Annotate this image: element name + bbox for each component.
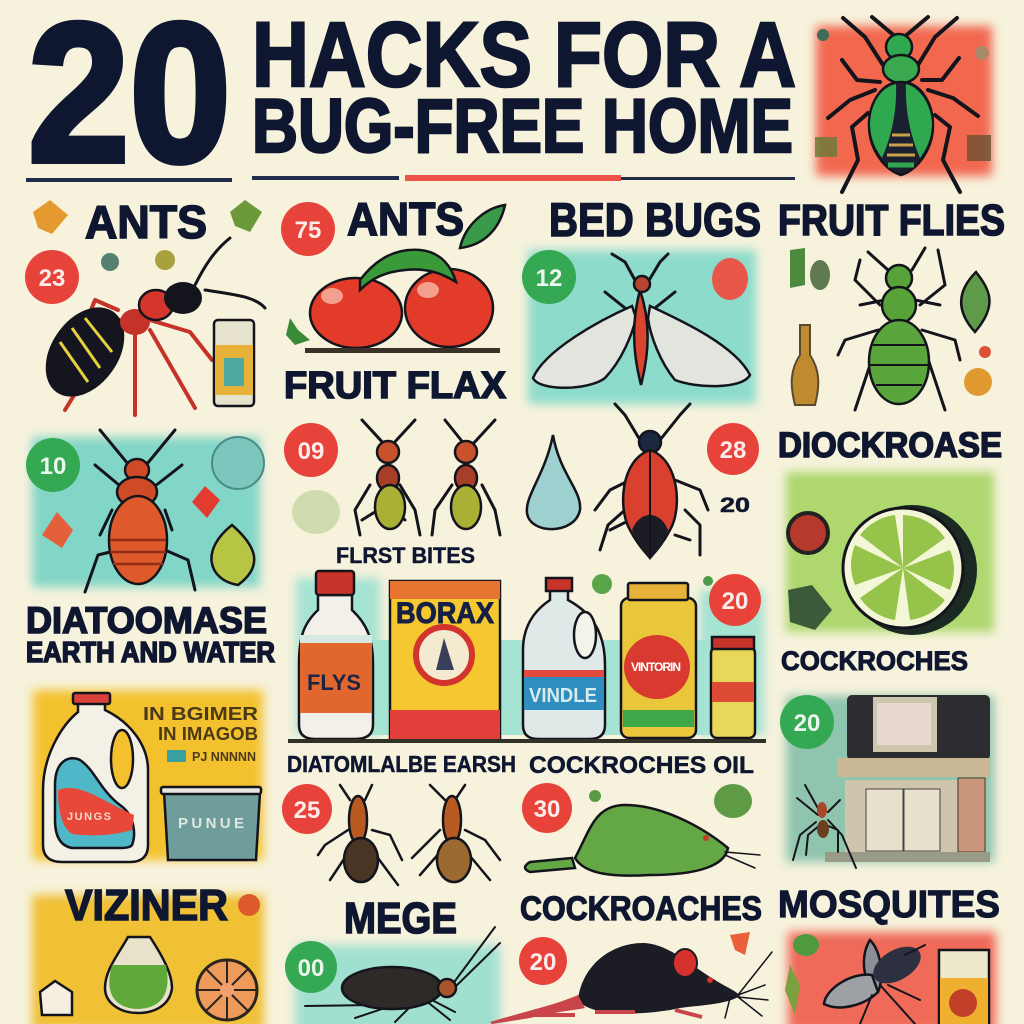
- box: borax: BORAX: [396, 597, 494, 630]
- icon: small basket: [815, 137, 837, 157]
- box: borax: [390, 581, 500, 740]
- icon: bucket: PUNUE: [178, 815, 244, 832]
- panel: top right green bug: [815, 17, 992, 192]
- icon: long leaf: [785, 965, 800, 1015]
- badge: 00: [285, 941, 337, 993]
- badge: 10: 10: [40, 453, 66, 480]
- badge: 75: [281, 202, 335, 256]
- label: first bites: FLRST BITES: [336, 543, 475, 568]
- badge: 30: 30: [534, 796, 560, 823]
- label: beginner text: IN BGIMER: [143, 704, 258, 724]
- badge: 09: [284, 423, 338, 477]
- label: cockroaches: COCKROCHES: [781, 646, 968, 676]
- icon: product jar: [214, 320, 254, 406]
- jar: yellow: [621, 583, 696, 738]
- badge: 23: [25, 250, 79, 304]
- panel: lime: [778, 426, 1002, 635]
- heading: ants: ANTS: [85, 196, 207, 248]
- heading: ants: ANTS: [347, 193, 464, 245]
- icon: leaf right: [230, 200, 262, 232]
- badge: 25: 25: [294, 797, 320, 824]
- icon: winged fly: [533, 254, 750, 388]
- badge: 20: 20: [794, 710, 820, 737]
- badge: 20: [709, 574, 761, 626]
- icon: red splat: [192, 486, 220, 518]
- icon: leaves: [211, 525, 254, 585]
- icon: oil bottle: [792, 325, 818, 405]
- panel: ants 1: [25, 196, 265, 415]
- icon: ant: [31, 238, 265, 415]
- panel: two ants: [284, 420, 500, 568]
- icon: orange leaf: [238, 894, 260, 916]
- panel: black rat: [490, 890, 772, 1024]
- swatch text: PJ NNNNN: [192, 749, 256, 764]
- badge: 20: 20: [722, 588, 748, 615]
- icon: dark bug: [305, 927, 500, 1022]
- panel: drop and ladybug: [527, 404, 759, 558]
- badge: 12: [522, 250, 576, 304]
- badge: 23: 23: [39, 265, 65, 292]
- icon: two tomatoes: [305, 250, 500, 353]
- label: fruit flax: FRUIT FLAX: [284, 365, 507, 407]
- icon: roach: [85, 430, 195, 592]
- panel: green rat: [522, 783, 760, 876]
- badge: 20: [519, 937, 567, 985]
- badge: 09: 09: [298, 438, 324, 465]
- title underline: [26, 175, 795, 182]
- bottle: flys: FLYS: [307, 670, 361, 695]
- label: diatomaceous earth: [26, 600, 275, 669]
- icon: dark leaves: [788, 585, 832, 630]
- icon: small globe: [817, 29, 829, 41]
- icon: leaf: [793, 934, 819, 956]
- icon: jug: JUNGS: [67, 811, 111, 823]
- icon: leaf left: [33, 200, 68, 234]
- icon: red flower: [788, 513, 828, 553]
- icon: black rat: [490, 943, 772, 1024]
- heading: vizner: VIZINER: [65, 881, 228, 930]
- badge: 20: 20: [530, 949, 556, 976]
- icon: computer cabinet: [825, 695, 990, 862]
- swatch text: [167, 749, 256, 764]
- badge: 28: [707, 423, 759, 475]
- panel: bed bugs: [522, 193, 761, 404]
- heading: cockroaches: COCKROACHES: [520, 890, 762, 928]
- icon: glass: [939, 950, 989, 1024]
- icon: small stack: [967, 135, 991, 161]
- panel: computer desk: [780, 695, 994, 868]
- bottle: flys: [299, 571, 373, 739]
- panel: vizner: [32, 881, 264, 1024]
- icon: lime: [843, 505, 977, 635]
- label: diatomaceous earth: DIATOOMASE: [26, 600, 267, 641]
- teal panel: [528, 250, 756, 404]
- leaf left: [286, 318, 310, 345]
- panel: yellow jug: [33, 690, 263, 862]
- panel: mosquitoes: [778, 884, 1000, 1024]
- icon: fruit: [712, 258, 748, 300]
- icon: leaf cluster: [292, 490, 340, 534]
- panel: two bugs: [282, 784, 500, 885]
- badge: 25: [282, 784, 332, 834]
- label: diatomaceous earth: DIATOMLALBE EARSH: [287, 751, 516, 777]
- bottle: vinegar: [523, 578, 605, 739]
- label: 20: 20: [720, 494, 750, 517]
- icon: bucket: [161, 787, 261, 860]
- icon: leaf: [460, 205, 505, 248]
- icon: house: [40, 981, 72, 1015]
- badge: 12: 12: [536, 265, 562, 292]
- icon: water drop: [527, 435, 580, 529]
- jar: small: [711, 637, 755, 738]
- panel: mege: [285, 894, 500, 1024]
- icon: leaf: [961, 272, 989, 332]
- icon: beetle: [595, 404, 708, 558]
- badge: 00: 00: [298, 955, 324, 982]
- title: BUG-FREE HOME: [252, 84, 793, 169]
- icon: fly: [824, 939, 927, 1024]
- heading: bed bugs: BED BUGS: [549, 193, 761, 246]
- badge: 28: 28: [720, 437, 746, 464]
- badge: 75: 75: [295, 217, 321, 244]
- icon: flask: [105, 937, 172, 1013]
- icon: orange blob: [42, 512, 73, 548]
- panel: roach on teal: [26, 430, 264, 592]
- jar: yellow: VINTORIN: [631, 660, 681, 674]
- icon: green rodent: [525, 805, 760, 876]
- icon: jug: [43, 693, 148, 862]
- icon: leaf: [730, 932, 750, 955]
- badge: 30: [522, 783, 572, 833]
- badge: 10: [26, 438, 80, 492]
- icon: spider: [793, 785, 856, 868]
- panel: fruit flies: [778, 196, 1005, 410]
- icon: green beetle: [828, 17, 978, 192]
- icon: green bug: [838, 248, 960, 410]
- icon: clock circle: [212, 437, 264, 489]
- panel: bottles: [288, 571, 766, 743]
- title: [28, 0, 796, 203]
- label: diatomaceous earth: EARTH AND WATER: [26, 637, 275, 669]
- heading: diockroase: DIOCKROASE: [778, 426, 1002, 465]
- icon: mosquito pair: [318, 785, 500, 885]
- badge: 20: [780, 695, 834, 749]
- label: cockroaches oil: COCKROCHES OIL: [529, 752, 754, 779]
- heading: mosquitoes: MOSQUITES: [778, 884, 1000, 926]
- heading: mege: MEGE: [344, 894, 457, 943]
- panel: cherries: [281, 193, 507, 407]
- icon: flower: [197, 960, 257, 1020]
- icon: ant pair: [355, 420, 500, 535]
- bottle: vinegar: VINDLE: [529, 685, 597, 707]
- title: HACKS FOR A: [252, 4, 796, 106]
- icon: leaf: [714, 784, 752, 818]
- text: small: IN IMAGOB: [158, 724, 258, 744]
